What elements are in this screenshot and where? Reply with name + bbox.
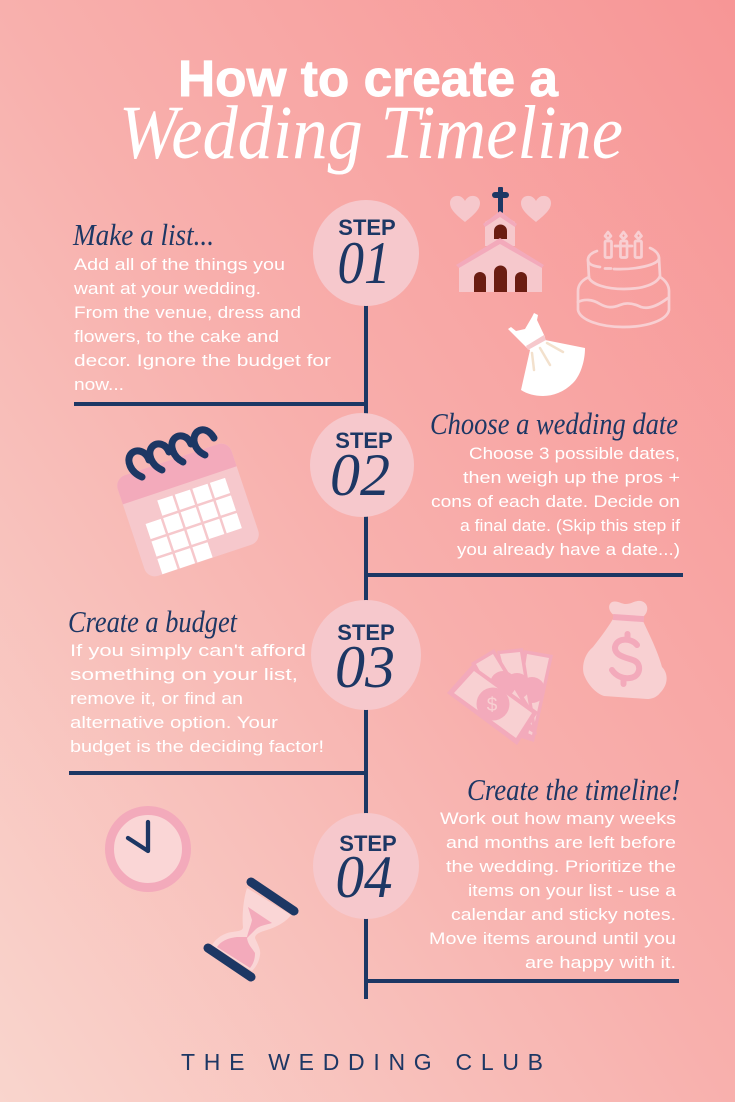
step 01 text block [72,217,331,394]
step 02 text block: you already have a date...) [457,540,680,559]
icon: clock [110,810,186,888]
step 04 text block: and months are left before [446,833,676,852]
title: Wedding Timeline [119,91,623,175]
step 04 text block: calendar and sticky notes. [451,905,676,924]
step 04 text block [429,772,680,972]
icon: hourglass [208,882,294,977]
icon: cake [578,232,669,327]
step 02 text block: Choose a wedding date [430,406,678,441]
step 03 text block: budget is the deciding factor! [70,737,324,756]
step 02 text block [430,406,680,559]
step 03 text block: alternative option. Your [70,713,278,732]
step 03 text block: remove it, or find an [70,689,243,708]
step 03 text block: something on your list, [70,665,298,684]
step 04 text block: Create the timeline! [467,772,680,807]
step 04 text block: items on your list - use a [468,881,677,900]
step 04 badge: 04 [336,844,392,910]
step 02 badge [310,413,414,517]
icon: banknotes [447,648,553,745]
icon: banknotes: $ [487,695,498,716]
step 02 text block: Choose 3 possible dates, [469,444,680,463]
step 03 text block: If you simply can't afford [70,641,306,660]
icon: calendar [114,430,262,579]
step 01 text block: flowers, to the cake and [74,327,279,346]
step 01 text block: From the venue, dress and [74,303,301,322]
step 02 text block: a final date. (Skip this step if [460,516,680,535]
title: How to create a [178,50,559,107]
icon: wedding dress [508,313,585,396]
step 03 badge: 03 [335,634,395,700]
icon: hearts [450,196,551,222]
step 04 badge [313,813,419,919]
step 04 text block: are happy with it. [525,953,676,972]
step 01 text block: decor. Ignore the budget for [74,351,331,370]
step 04 text block: the wedding. Prioritize the [446,857,676,876]
step 01 text block: want at your wedding. [73,279,261,298]
step 02 badge: STEP [335,428,393,453]
icon: money bag [583,601,667,699]
step 01 badge: 01 [338,230,390,296]
step 04 text block: Move items around until you [429,929,676,948]
step 03 badge [311,600,421,710]
step 01 badge: STEP [338,215,396,240]
step 01 badge [313,200,419,306]
step 02 text block: then weigh up the pros + [463,468,680,487]
icon: church [456,187,544,292]
footer brand: THE WEDDING CLUB [181,1049,543,1075]
step 02 badge: 02 [330,442,390,508]
step 03 badge: STEP [337,620,395,645]
timeline connector lines [69,290,683,999]
step 01 text block: now... [74,375,124,394]
step 02 text block: cons of each date. Decide on [431,492,680,511]
step 04 text block: Work out how many weeks [440,809,676,828]
title [119,50,623,175]
step 01 text block: Add all of the things you [74,255,285,274]
step 03 text block: Create a budget [68,604,238,639]
step 04 badge: STEP [339,831,397,856]
step 01 text block: Make a list... [72,217,214,252]
step 03 text block [68,604,324,756]
